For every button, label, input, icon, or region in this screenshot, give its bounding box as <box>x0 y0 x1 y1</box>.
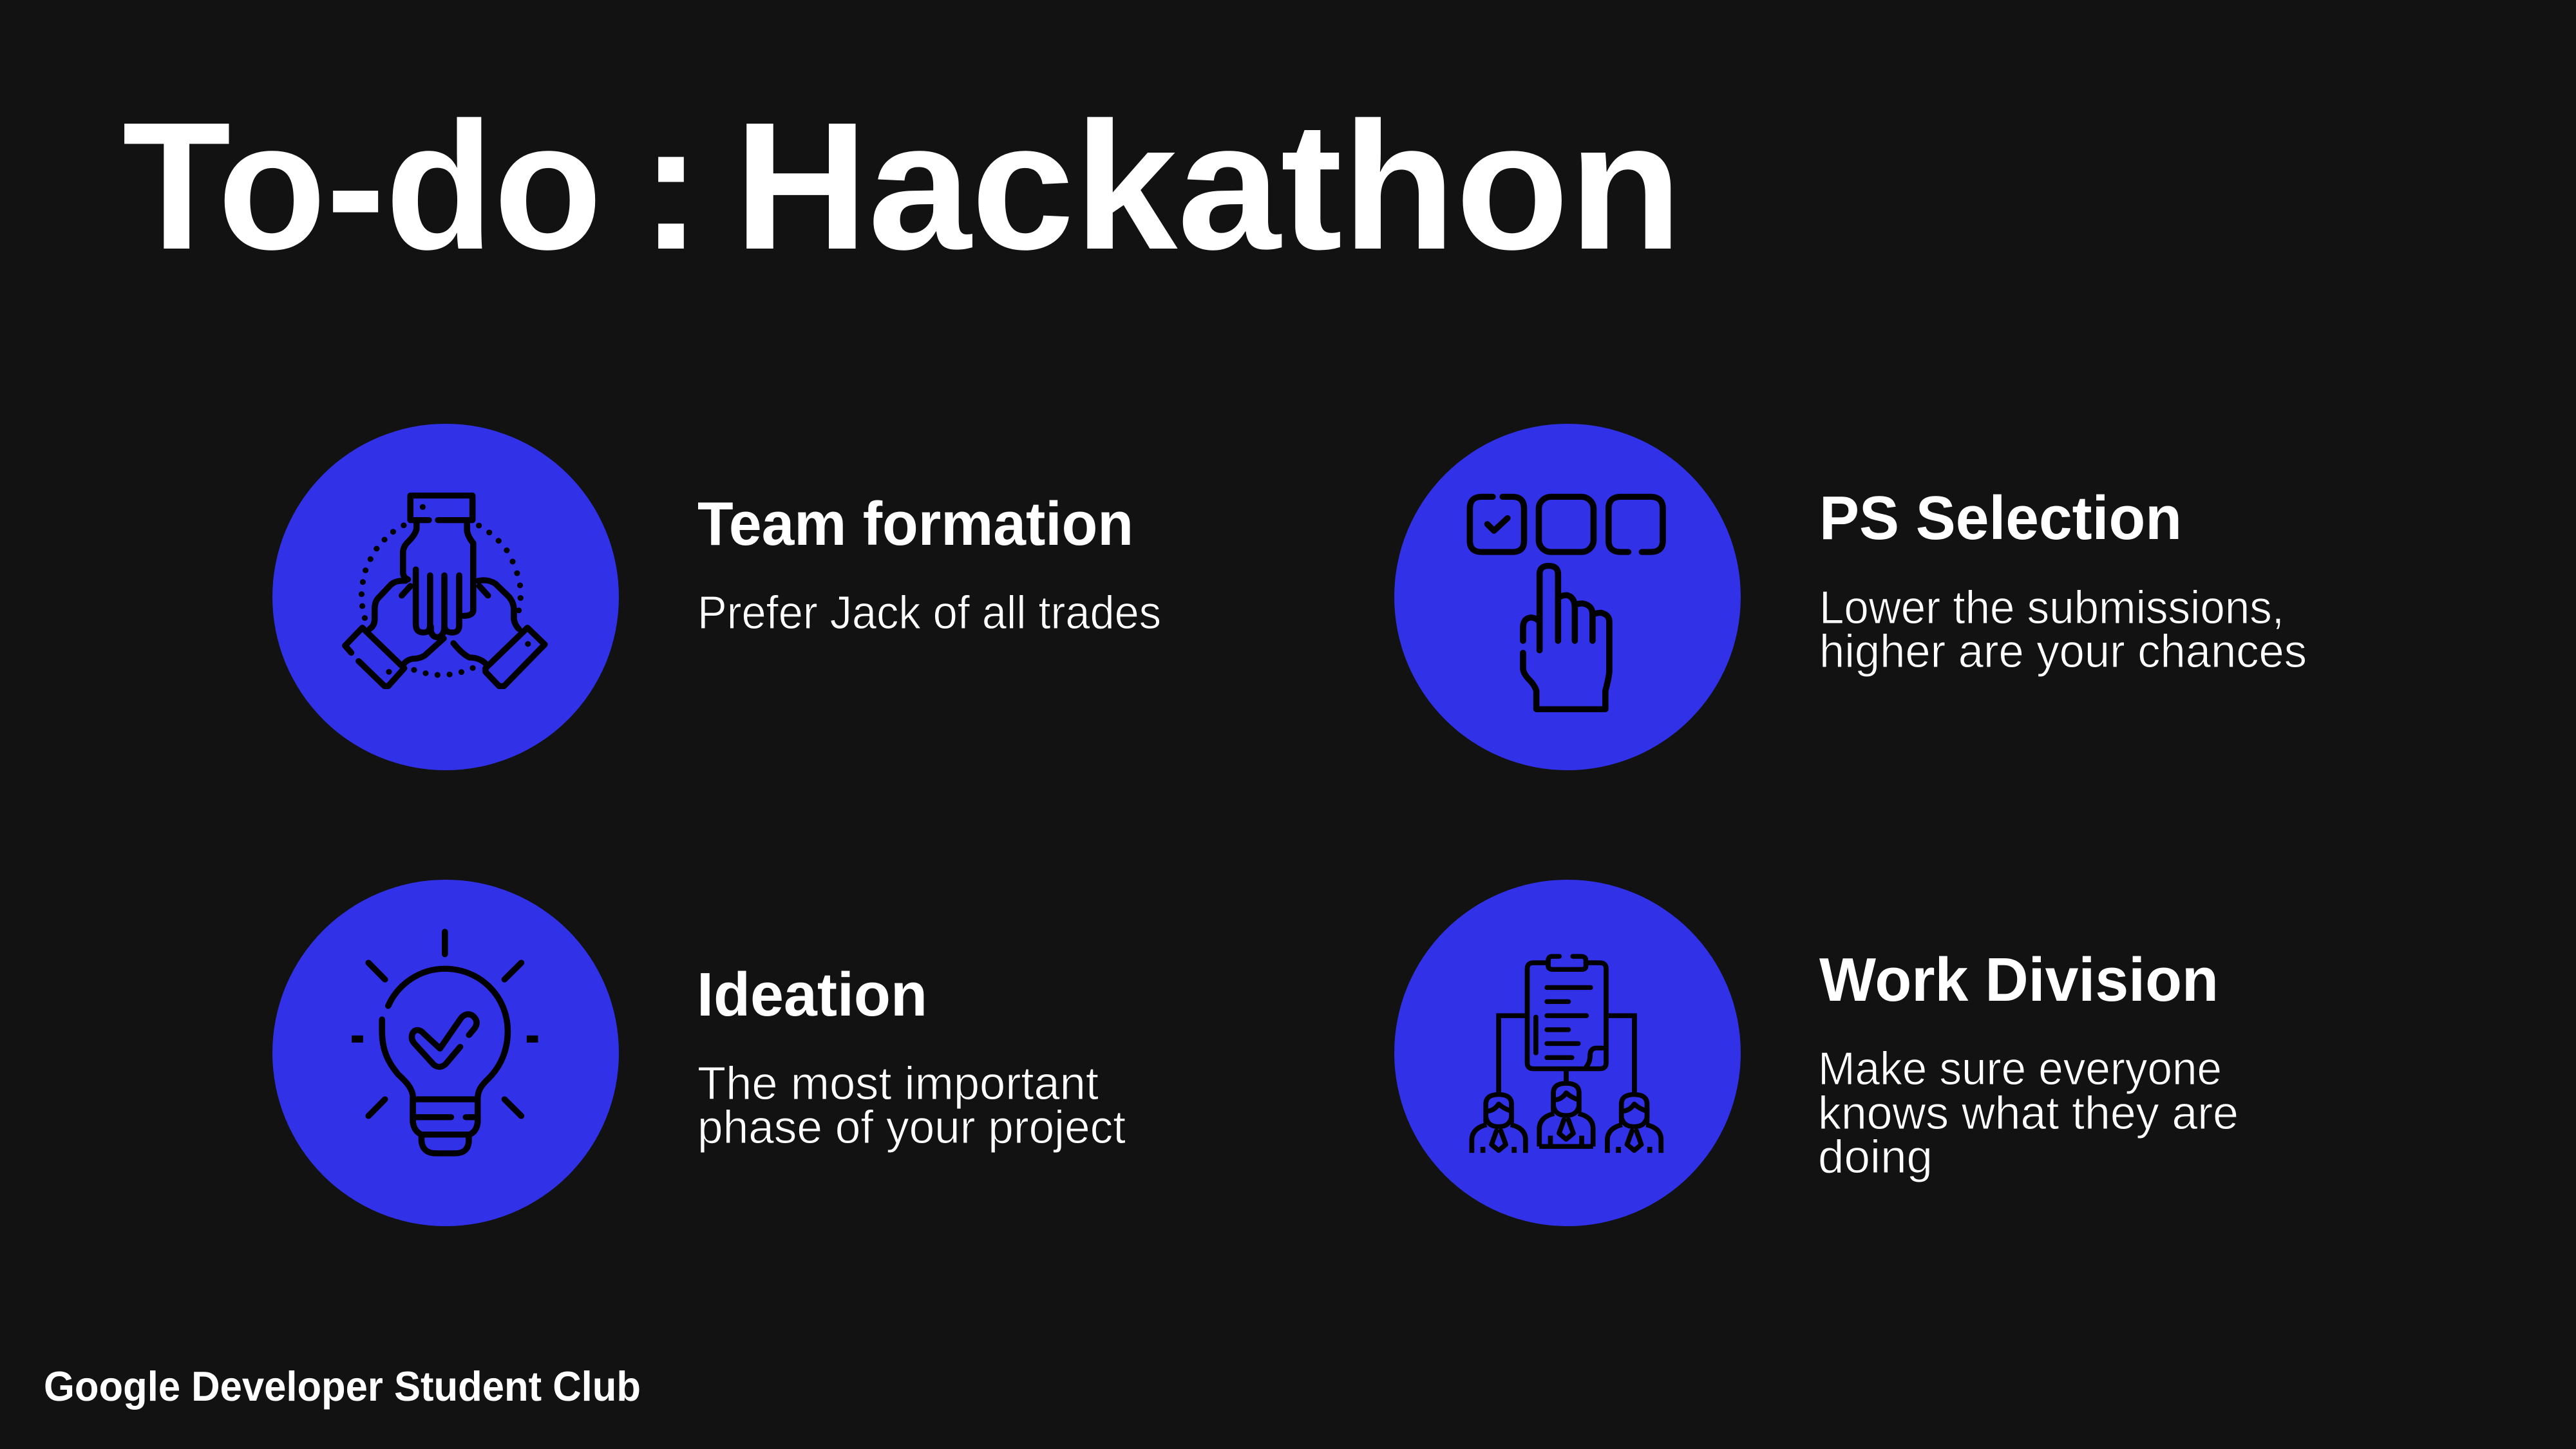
panel: team formation <box>272 424 1161 770</box>
description: ideation: The most important <box>697 1058 1099 1110</box>
icon: three joined hands <box>345 495 545 686</box>
title: To-do <box>122 84 602 287</box>
panel: PS selection <box>1394 424 2307 770</box>
description: PS selection: Lower the submissions, <box>1819 582 2284 634</box>
icon background circle <box>272 880 619 1226</box>
heading: PS selection: PS Selection <box>1819 484 2182 553</box>
icon background circle <box>272 424 619 770</box>
description: team formation: Prefer Jack of all trades <box>697 587 1161 639</box>
description: ideation: phase of your project <box>697 1102 1126 1153</box>
icon background circle <box>1394 880 1741 1226</box>
icon: light bulb with check <box>352 932 538 1153</box>
heading: work division: Work Division <box>1819 945 2219 1014</box>
panel: work division <box>1394 880 2239 1226</box>
title: : <box>641 84 701 287</box>
description: work division: knows what they are <box>1818 1088 2239 1139</box>
title <box>122 84 1682 287</box>
description: PS selection <box>1819 582 2307 677</box>
icon: hand selecting checkbox <box>1470 497 1663 709</box>
description: PS selection: higher are your chances <box>1819 626 2307 677</box>
title: Hackathon <box>734 84 1682 287</box>
panel: ideation <box>272 880 1126 1226</box>
footer: club name: Google Developer Student Club <box>44 1363 641 1410</box>
description: work division: doing <box>1818 1132 1933 1183</box>
heading: ideation: Ideation <box>697 960 927 1029</box>
icon: clipboard and three people <box>1472 956 1661 1153</box>
description: work division <box>1818 1043 2239 1183</box>
description: ideation <box>697 1058 1126 1153</box>
icon background circle <box>1394 424 1741 770</box>
description: work division: Make sure everyone <box>1818 1043 2222 1095</box>
heading: team formation: Team formation <box>697 489 1133 558</box>
